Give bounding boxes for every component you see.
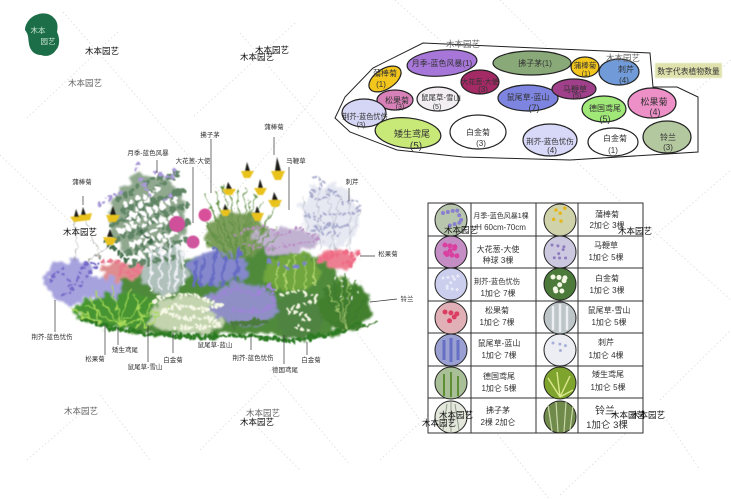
table text: 刺芹 <box>598 337 614 347</box>
plant labels: 白金菊 <box>163 355 183 364</box>
plan labels: 马鞭草 <box>563 84 587 94</box>
plan labels: 松果菊 <box>385 95 409 105</box>
watermarks: 木本园艺 <box>444 225 478 235</box>
plan patches <box>342 47 691 156</box>
plant labels: 矮生鸢尾 <box>112 345 138 354</box>
watermarks: 木本园艺 <box>85 46 119 56</box>
watermarks <box>63 39 665 428</box>
plan labels: (4) <box>547 146 557 155</box>
table text: 白金菊 <box>595 273 619 283</box>
white daisies <box>155 295 222 328</box>
watermarks: 木本园艺 <box>439 410 473 420</box>
plant labels: 月季-蓝色风暴 <box>127 148 169 157</box>
table text: 1加仑 5棵 <box>591 317 627 327</box>
plan labels: 松果菊 <box>640 96 668 107</box>
legend note: 数字代表植物数量 <box>657 66 720 76</box>
plant table <box>428 203 643 433</box>
table text: 2棵 2加仑 <box>480 417 516 427</box>
watermarks: 木本园艺 <box>64 406 98 416</box>
sea holly <box>303 178 360 250</box>
watermarks: 木本园艺 <box>68 78 102 88</box>
colour masses <box>46 175 371 340</box>
plan labels: 月季-蓝色风暴(1) <box>412 58 473 68</box>
plant labels: 德国鸢尾 <box>272 365 298 374</box>
table text: H 60cm-70cm <box>476 223 526 232</box>
organic foliage <box>50 160 378 341</box>
rose shrub <box>100 160 190 265</box>
plant labels: 松果菊 <box>378 249 398 258</box>
table text: 2加仑 3棵 <box>589 220 625 230</box>
plan labels: (3) <box>396 104 404 111</box>
plan labels: (3) <box>476 139 486 148</box>
table text: 1加仑 5棵 <box>588 252 624 262</box>
plant labels: 荆芥-蓝色忧伤 <box>232 353 274 362</box>
plan labels: (5) <box>410 141 422 152</box>
yellow coneflowers <box>70 157 285 245</box>
watermarks: 木本园艺 <box>611 410 645 420</box>
logo: 园艺 <box>40 37 56 46</box>
table text: 种球 3棵 <box>483 255 513 265</box>
logo <box>25 13 59 56</box>
table text: 1加仑 7棵 <box>479 317 515 327</box>
plant labels: 铃兰 <box>400 294 414 303</box>
plan labels: (3) <box>478 85 488 94</box>
plan labels: 蒲棒菊 <box>574 60 597 70</box>
plant labels: 马鞭草 <box>286 156 306 165</box>
plan labels: 荆芥-蓝色忧伤 <box>526 136 574 146</box>
watermarks: 木本园艺 <box>446 39 480 49</box>
watermarks: 木本园艺 <box>422 418 456 428</box>
table text: 1加仑 4棵 <box>588 350 624 360</box>
plan labels: 鼠尾草-雪山 <box>421 92 461 102</box>
verbena <box>235 225 320 248</box>
lily of the valley <box>325 272 378 330</box>
watermarks: 木本园艺 <box>240 417 274 427</box>
plan labels: 拂子茅(1) <box>518 58 552 68</box>
table text: 马鞭草 <box>594 240 618 250</box>
right pink coneflower <box>320 254 358 264</box>
plan labels: 白金菊 <box>603 133 627 143</box>
table text: 拂子茅 <box>486 405 510 415</box>
white daisy right <box>282 290 318 330</box>
table text: 1加仑 3棵 <box>586 419 628 431</box>
pink coneflower left <box>104 260 143 278</box>
plan labels: (5) <box>573 93 581 100</box>
plant labels: 蒲棒菊 <box>72 177 92 186</box>
table text: 鼠尾草-蓝山 <box>478 338 520 348</box>
table text: 荆芥-蓝色忧伤 <box>474 277 520 286</box>
plant labels: 拂子茅 <box>200 130 220 139</box>
plan labels: 白金菊 <box>466 127 490 137</box>
table text: 1加仑 7棵 <box>481 350 517 360</box>
legend note <box>655 63 722 78</box>
pink alliums <box>169 208 212 248</box>
watermarks: 木本园艺 <box>246 408 280 418</box>
table text: 月季-蓝色风暴1棵 <box>473 211 529 220</box>
plant labels: 刺芹 <box>346 177 359 186</box>
table text: 大花葱-大使 <box>477 244 519 254</box>
dwarf iris <box>72 285 170 328</box>
mid iris <box>270 255 315 290</box>
plan labels: 刺芹 <box>618 64 634 74</box>
plant labels: 白金菊 <box>301 355 321 364</box>
plant labels: 大花葱-大使 <box>176 156 211 165</box>
watermarks: 木本园艺 <box>255 45 289 55</box>
plant labels: 鼠尾草-蓝山 <box>198 340 232 349</box>
table text <box>473 209 630 431</box>
plant labels: 松果菊 <box>85 354 105 363</box>
plan labels: 矮生鸢尾 <box>394 128 430 139</box>
table text: 1加仑 5棵 <box>590 382 626 392</box>
plan labels: (1) <box>376 80 386 89</box>
plant labels: 荆芥-蓝色忧伤 <box>31 332 73 341</box>
plant labels <box>31 122 414 374</box>
watermarks: 木本园艺 <box>240 52 274 62</box>
plan labels: (7) <box>528 103 540 113</box>
plant illustration <box>46 157 378 341</box>
table text: 蒲棒菊 <box>595 209 619 219</box>
catmint right <box>215 285 275 325</box>
table grid <box>428 203 643 433</box>
plan labels: 铃兰 <box>660 132 676 142</box>
table text: 1加仑 7棵 <box>480 288 516 298</box>
ground edge <box>82 318 364 341</box>
plan labels: (4) <box>650 107 661 117</box>
table text: 德国鸢尾 <box>483 371 515 381</box>
watermarks: 木本园艺 <box>63 227 97 237</box>
plan labels: (1) <box>582 71 590 78</box>
plan labels: (5) <box>600 114 611 124</box>
snow sage <box>150 240 184 290</box>
plan labels: (4) <box>619 76 629 85</box>
table text: 1加仑 3棵 <box>589 285 625 295</box>
table text: 1加仑 5棵 <box>481 383 517 393</box>
plan labels: (1) <box>608 146 618 155</box>
planting plan <box>335 43 698 160</box>
table text: 鼠尾草-雪山 <box>588 305 630 315</box>
feather grass <box>200 185 280 258</box>
table text: 铃兰 <box>595 404 615 417</box>
blue sage spikes <box>194 248 240 285</box>
plant labels: 鼠尾草-雪山 <box>128 362 162 371</box>
watermarks: 木本园艺 <box>618 226 652 236</box>
plan labels: (5) <box>433 104 441 111</box>
plan labels: (3) <box>357 122 365 129</box>
plan labels: 鼠尾草-蓝山 <box>507 92 549 102</box>
plan labels: (3) <box>663 143 673 152</box>
plan labels: 蒲棒菊 <box>373 68 397 78</box>
logo: 木本 <box>30 25 46 35</box>
left catmint <box>50 218 110 298</box>
plan labels <box>342 58 676 155</box>
plan labels: 德国鸢尾 <box>589 103 621 113</box>
table text: 矮生鸢尾 <box>592 369 624 379</box>
watermarks: 木本园艺 <box>631 410 665 420</box>
plant labels: 蒲棒菊 <box>264 122 284 131</box>
watermarks: 木本园艺 <box>606 53 640 63</box>
bed outline <box>335 43 698 160</box>
table thumbnails <box>435 204 576 433</box>
table text: 松果菊 <box>485 305 509 315</box>
thumbnail details <box>443 208 573 432</box>
plan labels: 大花葱-大使 <box>461 77 499 86</box>
plan labels: 荆芥-蓝色忧伤 <box>342 112 388 121</box>
